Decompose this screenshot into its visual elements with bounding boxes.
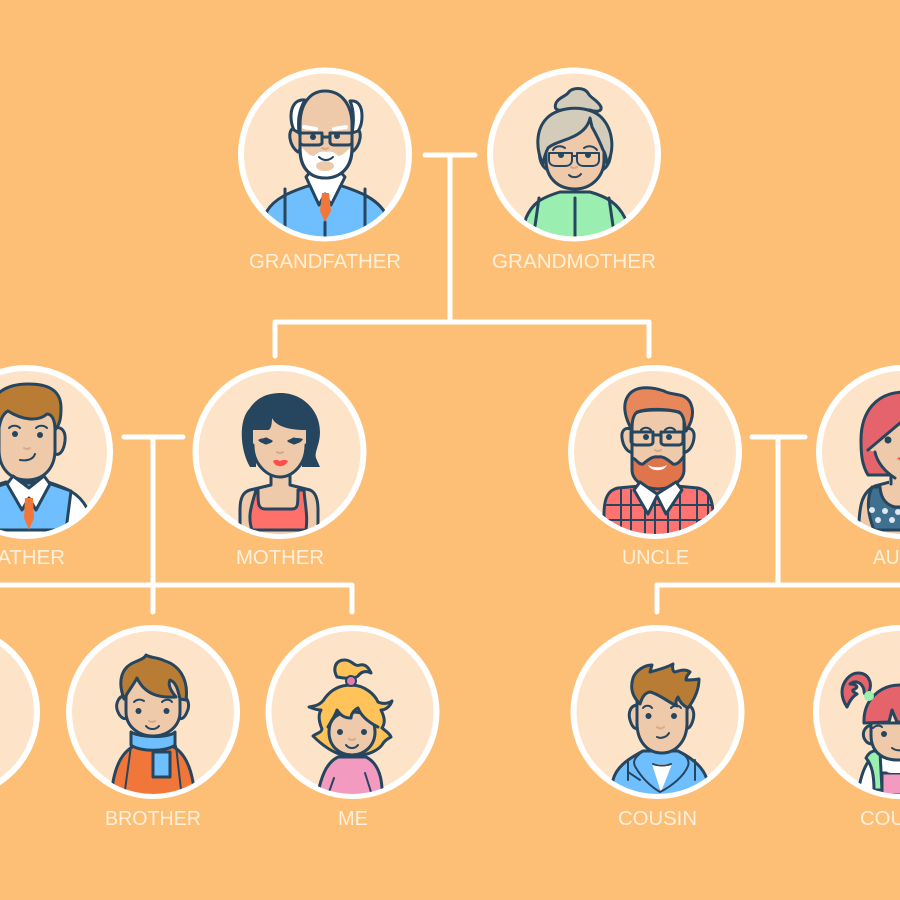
connector: grandparents to parents [275,155,649,356]
connector: parents to children [0,437,352,612]
portrait: father [0,368,110,545]
label: uncle: UNCLE [622,547,689,569]
connector: uncle and aunt to cousins [657,437,900,612]
portrait: mother [196,368,364,540]
label: cousin: COUSIN [618,808,697,830]
portrait: grandmother [490,70,658,250]
label: grandfather: GRANDFATHER [249,251,401,273]
portrait: uncle [571,368,739,545]
label: mother: MOTHER [236,547,324,569]
portrait: sister [0,628,37,796]
label: me: ME [338,808,368,830]
portrait: me [268,628,436,800]
label: brother: BROTHER [105,808,201,830]
portrait: grandfather [241,70,409,250]
portrait: brother [69,628,237,800]
portrait: cousin girl [816,628,900,796]
portrait: cousin [574,628,742,800]
portrait: aunt [819,368,900,540]
label: grandmother: GRANDMOTHER [492,251,656,273]
